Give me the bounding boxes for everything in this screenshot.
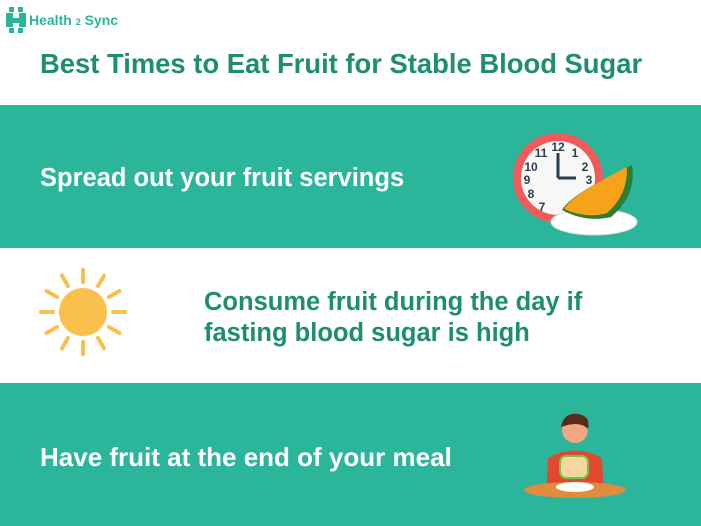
panel: end of meal [0,383,701,526]
text: spread: Spread out your fruit servings [40,164,404,192]
icon: clock and melon [513,133,638,236]
text: consume during day: fasting blood sugar is high [204,319,530,347]
icon: clock and melon: 2 [582,160,589,174]
icon: sun [39,268,127,356]
panel: spread out [0,105,701,248]
icon: clock and melon: 10 [524,160,538,174]
logo: Health 2 Sync [29,12,118,28]
icon: clock and melon: 11 [535,146,548,160]
icon: clock and melon: 1 [572,146,579,160]
logo [6,7,118,33]
icon: man eating [524,414,626,498]
icon: clock and melon: 7 [539,200,546,214]
title: Best Times to Eat Fruit for Stable Blood Sugar [40,48,642,79]
text: consume during day [204,288,582,347]
icon: clock and melon: 8 [528,187,535,201]
icon: clock and melon: 3 [586,173,593,187]
icon: clock and melon: 12 [551,140,565,154]
icon: clock and melon: 9 [524,173,531,187]
text: consume during day: Consume fruit during the day if [204,288,582,316]
text: end of meal: Have fruit at the end of your meal [40,442,452,472]
